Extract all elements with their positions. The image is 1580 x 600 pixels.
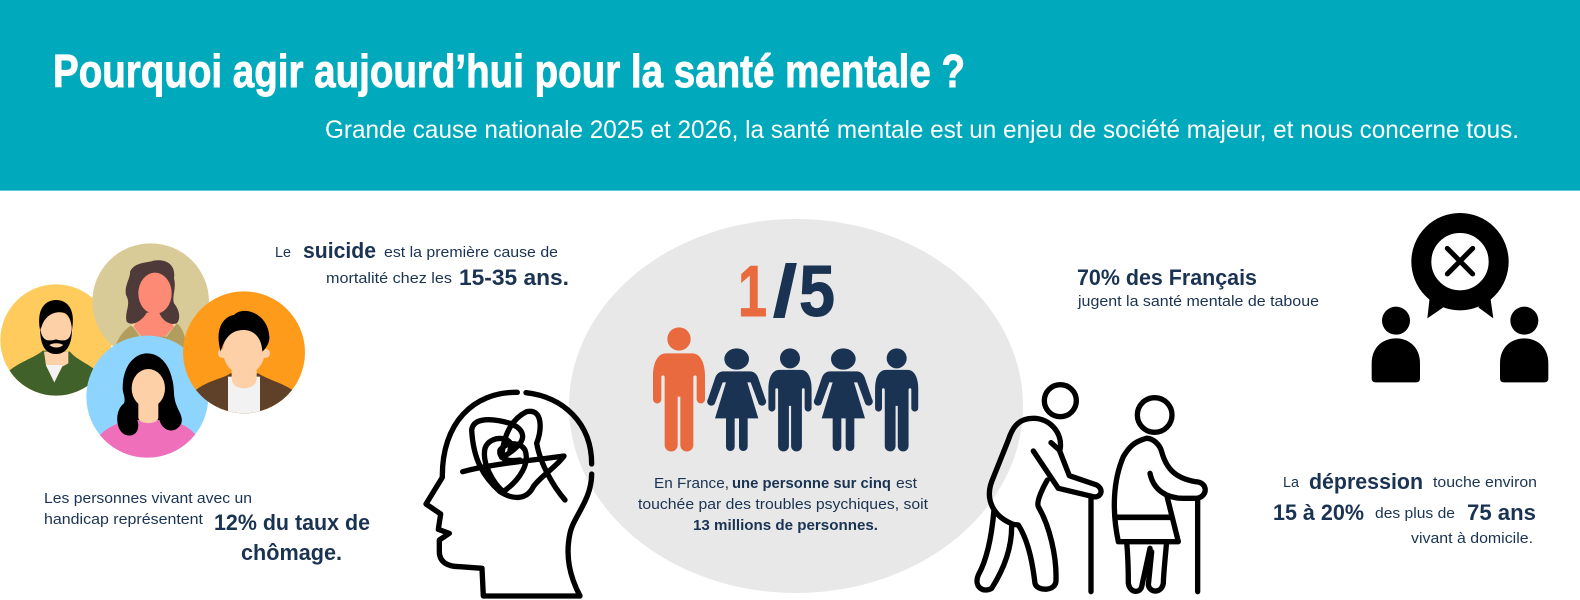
icon: head with tangled thoughts [426,392,592,596]
avatars group [0,240,307,460]
icon: navy woman [707,348,766,451]
text: suicide: mortalité chez les [326,270,452,287]
icon: navy woman [814,348,873,451]
text: handicap: handicap représentent [44,511,204,528]
statistic: 1/5: 5 [799,252,835,332]
text: suicide: est la première cause de [384,244,558,261]
text: handicap: 12% du taux de [214,510,370,535]
text: handicap [44,490,370,565]
central grey ellipse panel [569,219,1023,593]
text: dépression: La [1283,474,1300,491]
person left [1372,307,1420,382]
person right [1500,307,1548,382]
statistic: 1/5: / [773,252,797,332]
text: one person in five: 13 millions de personnes. [693,517,878,534]
icon: navy man [875,348,918,451]
icon: elderly couple with canes [977,385,1205,592]
icon: orange person [653,327,705,451]
text: suicide: suicide [303,238,376,263]
text: suicide: Le [275,244,291,261]
text: dépression [1273,469,1537,547]
text: one person in five: En France, [654,475,729,492]
text: suicide: 15-35 ans. [459,265,569,290]
statistic: 1/5 [738,252,835,332]
avatar: curly-haired woman on beige [92,243,209,348]
text: suicide [275,238,569,290]
text: 70% des Français [1077,265,1319,310]
avatar: long-haired woman on blue [85,335,210,460]
text: 70% des Français: jugent la santé mentale de taboue [1077,293,1319,310]
text: dépression: touche environ [1433,474,1537,491]
avatar: bearded man on yellow [0,283,113,400]
title: Pourquoi agir aujourd’hui pour la santé mentale ? [53,45,965,97]
text: dépression: dépression [1309,469,1423,494]
text: 70% des Français: 70% des Français [1077,265,1257,290]
speech bubble with cross [1421,223,1499,318]
text: one person in five: est [896,475,918,492]
text: dépression: 15 à 20% [1273,500,1364,525]
subtitle: Grande cause nationale 2025 et 2026, la santé mentale est un enjeu de société majeur, et nous concerne tous. [325,116,1519,144]
text: one person in five: une personne sur cinq [732,475,891,492]
header banner [0,0,1580,191]
elderly woman [1114,398,1205,592]
text: handicap: Les personnes vivant avec un [44,490,252,507]
text: dépression: 75 ans [1467,500,1536,525]
text: dépression: des plus de [1375,505,1455,522]
elderly man [977,385,1101,592]
text: one person in five: touchée par des troubles psychiques, soit [638,496,929,513]
icon row: five people [653,327,918,451]
icon: navy man [768,348,812,451]
statistic: 1/5: 1 [738,252,767,332]
avatar: man on orange [182,290,307,417]
text: dépression: vivant à domicile. [1411,530,1533,547]
icon: taboo speech bubble between two people [1372,223,1548,382]
text: one person in five [638,475,929,534]
text: handicap: chômage. [241,540,342,565]
